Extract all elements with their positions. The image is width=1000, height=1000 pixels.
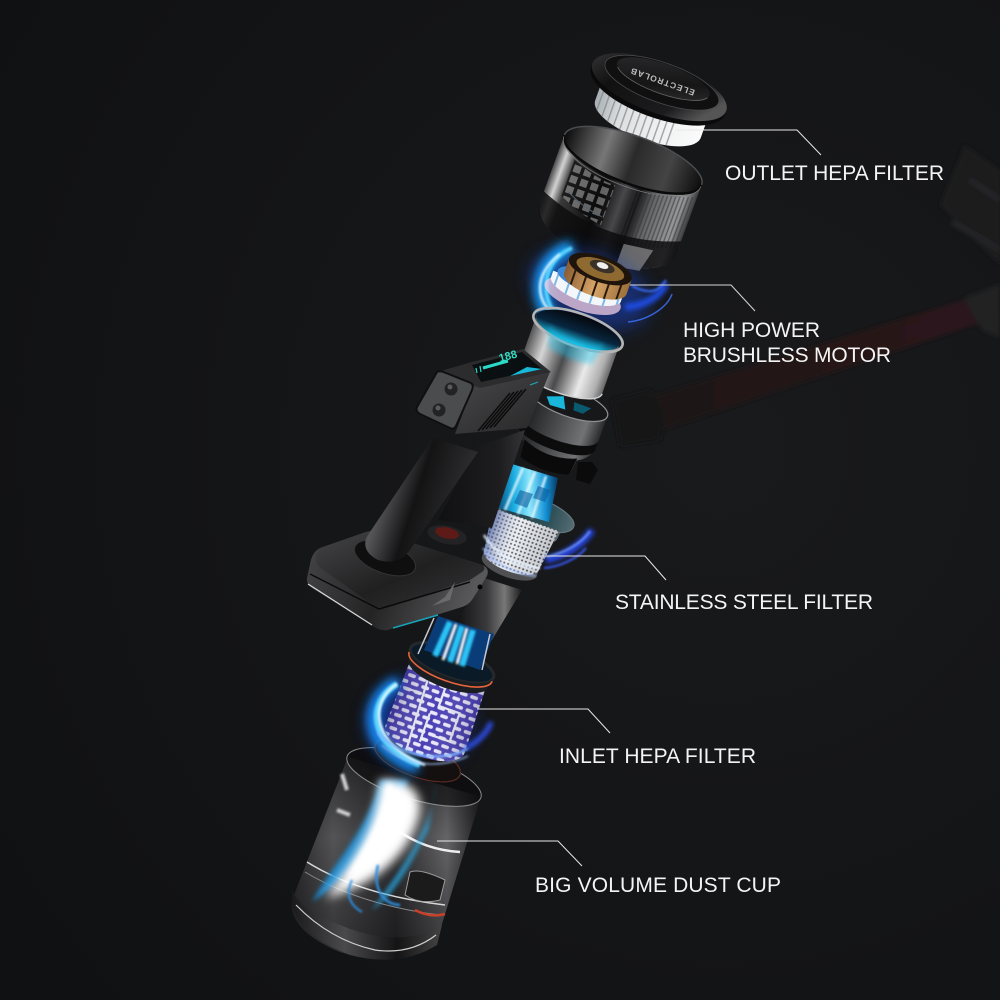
cup base [292,890,442,960]
callout: high power brushless motor: HIGH POWER [683,319,820,342]
display screen: 188 [498,349,519,365]
white stator ring [547,271,623,313]
handle body rear [438,430,525,528]
pleated white filter [588,75,710,158]
cyan airflow upper [495,464,558,522]
cup rim [341,735,487,819]
blue swirl in front of motor [540,254,666,320]
dark tube [452,578,522,640]
lid brand text: ELECTROLAB [629,66,696,98]
grip socket [350,533,420,583]
callout: stainless steel filter: STAINLESS STEEL FILTER [615,591,873,614]
callout: inlet HEPA filter: INLET HEPA FILTER [559,745,756,768]
blue swirl on stainless filter [483,530,592,576]
blue swirl in front of inlet filter [373,682,491,768]
handle head with display [416,349,551,434]
cyan airflow lower [418,616,494,670]
silver cylinder and ring [512,299,628,408]
orange sealing ring [402,648,493,702]
blue haze behind inlet filter [368,678,472,766]
motor housing [528,112,710,285]
ribbed band [614,177,694,261]
inlet HEPA filter [374,641,496,782]
lower dark band [529,191,681,283]
callout: stainless steel filter [543,556,873,614]
battery base [307,522,488,630]
callout: high power brushless motor: BRUSHLESS MOTOR [683,344,891,367]
red power button [426,522,468,548]
front face with two buttons [416,371,473,429]
cup highlights [307,862,445,905]
dust cup [292,735,487,960]
callout: big volume dust cup [437,841,781,897]
stainless steel filter [482,510,560,581]
callout: inlet HEPA filter [477,709,756,768]
callout: high power brushless motor [630,285,891,367]
fan housing [504,374,612,484]
callout: outlet HEPA filter [676,130,944,185]
callout: outlet HEPA filter: OUTLET HEPA FILTER [725,162,944,185]
outlet filter and lid [574,39,735,163]
teal stainless cap [491,485,579,541]
lid [582,39,735,140]
callout: big volume dust cup: BIG VOLUME DUST CUP [535,874,781,897]
blue swirl behind motor [519,235,672,345]
ghost vacuum stick in background [612,145,1000,446]
brushless motor [540,241,636,323]
airflow plume [312,780,436,912]
vents [478,389,526,431]
mesh window [557,160,619,225]
ring interior [406,634,498,692]
handle grip [365,438,478,562]
gold rotor [560,246,636,306]
black rear latch [576,462,598,484]
